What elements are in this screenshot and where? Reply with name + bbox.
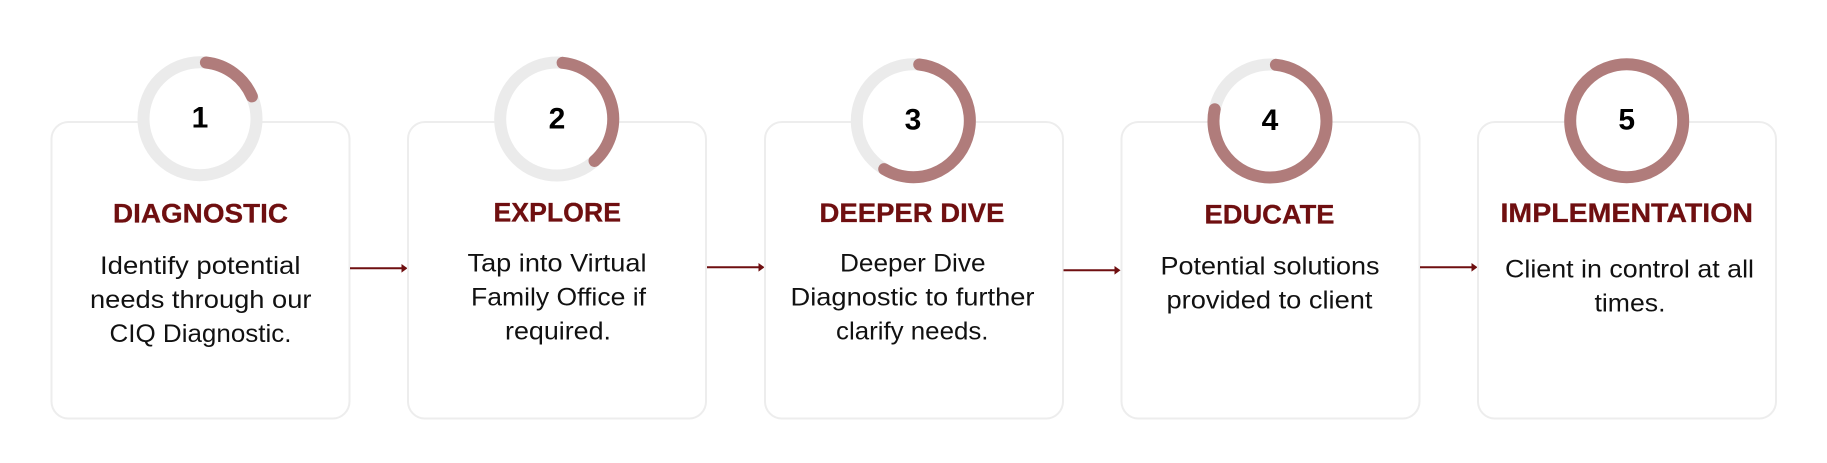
text: step 4 description: Potential solutions — [1160, 252, 1380, 280]
text: step 3 description: Deeper Dive — [840, 249, 986, 277]
progress ring 2 — [500, 62, 613, 176]
text: step 1 description: CIQ Diagnostic. — [110, 320, 292, 348]
card outline 5 — [1478, 122, 1776, 418]
text: step 5 description: Client in control at all — [1505, 256, 1754, 284]
text: step 1 description: Identify potential — [100, 252, 300, 280]
panel: step 5 implementation — [1478, 64, 1776, 418]
text: step 1 description: needs through our — [90, 286, 312, 314]
text: step 2 description — [468, 250, 646, 346]
heading: explore: EXPLORE — [494, 198, 621, 228]
card outline 1 — [52, 122, 350, 418]
arrow: step 4 to 5 — [1420, 263, 1478, 272]
panel: step 3 deeper dive — [765, 64, 1063, 418]
heading: deeper dive: DEEPER DIVE — [820, 198, 1004, 228]
text: step 5 description: times. — [1594, 290, 1666, 318]
progress ring 3 — [857, 64, 970, 177]
progress ring 5 — [1570, 64, 1683, 177]
arrow: step 2 to 3 — [707, 263, 764, 272]
progress ring 4 — [1213, 64, 1326, 178]
heading: implementation: IMPLEMENTATION — [1500, 198, 1753, 228]
text: step 5 description — [1505, 256, 1754, 318]
panel: step 1 diagnostic — [52, 62, 350, 418]
step number 1: 1 — [192, 102, 208, 134]
card outline 2 — [408, 122, 706, 418]
text: step 3 description — [790, 249, 1034, 345]
text: step 1 description — [90, 252, 312, 348]
text: step 3 description: clarify needs. — [836, 317, 988, 345]
arrow: step 1 to 2 — [350, 264, 408, 273]
text: step 2 description: Tap into Virtual — [468, 250, 646, 278]
arrow: step 3 to 4 — [1064, 266, 1120, 275]
panel: step 4 educate — [1122, 64, 1420, 418]
panel: step 2 explore — [408, 62, 706, 418]
step number 3: 3 — [905, 104, 921, 137]
step number 2: 2 — [549, 102, 565, 136]
text: step 3 description: Diagnostic to further — [790, 283, 1034, 311]
heading: diagnostic: DIAGNOSTIC — [113, 199, 288, 229]
card outline 4 — [1122, 122, 1420, 418]
card outline 3 — [765, 122, 1063, 418]
heading: educate: EDUCATE — [1204, 199, 1334, 229]
text: step 2 description: Family Office if — [471, 284, 646, 312]
step number 5: 5 — [1618, 104, 1635, 137]
progress ring 1 — [144, 62, 256, 175]
text: step 4 description: provided to client — [1166, 286, 1373, 314]
text: step 2 description: required. — [505, 318, 611, 346]
step number 4: 4 — [1262, 104, 1279, 137]
text: step 4 description — [1160, 252, 1380, 314]
